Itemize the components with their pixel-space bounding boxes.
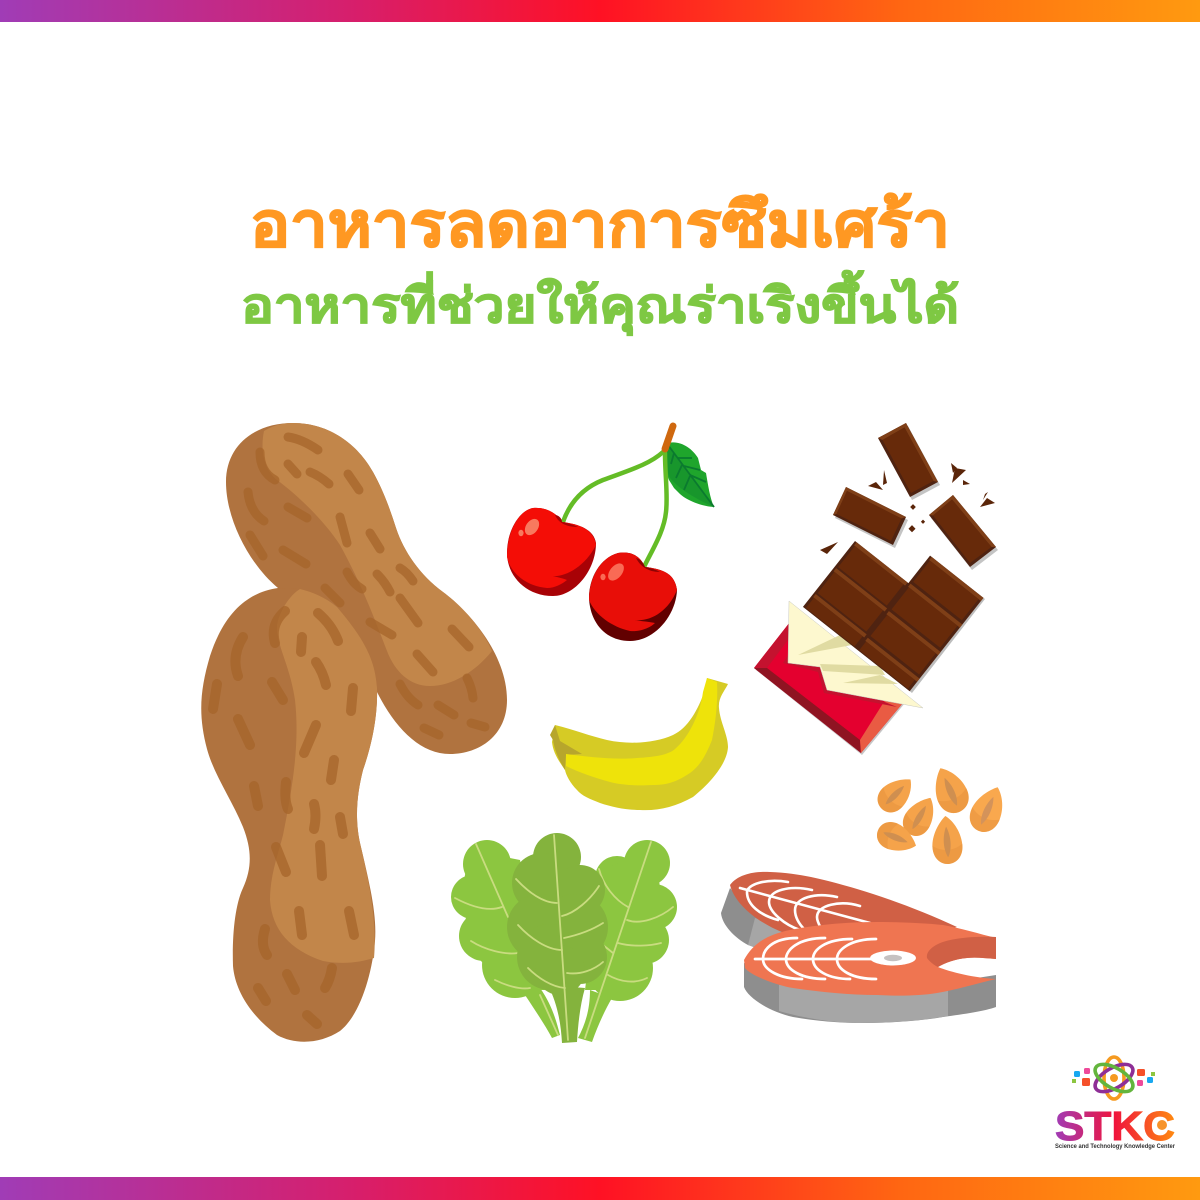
logo atom mark bbox=[1091, 1057, 1137, 1099]
icon: chocolate bar bbox=[754, 423, 998, 755]
right leaf bbox=[578, 840, 677, 1042]
broken pieces bbox=[833, 423, 998, 570]
left leaf bbox=[451, 840, 560, 1038]
stems bbox=[563, 452, 667, 567]
logo dots bbox=[1072, 1068, 1155, 1086]
back salmon steak bbox=[721, 872, 957, 947]
front salmon steak bbox=[744, 922, 996, 1023]
icon: almonds bbox=[872, 762, 1011, 865]
white paper bbox=[788, 601, 923, 708]
icon: cherries bbox=[507, 426, 714, 641]
front peanut bbox=[201, 588, 377, 1042]
logo: STKC bbox=[1055, 1057, 1176, 1150]
logo tagline: Science and Technology Knowledge Center bbox=[1055, 1144, 1176, 1150]
left cherry bbox=[507, 508, 596, 596]
chocolate shards bbox=[820, 463, 995, 554]
bottom gradient band bbox=[0, 1177, 1200, 1200]
logo letters: STKC bbox=[1055, 1103, 1175, 1149]
bar segments bbox=[803, 514, 985, 693]
top gradient band bbox=[0, 0, 1200, 22]
icon: banana bbox=[550, 678, 728, 810]
red wrapper bbox=[754, 622, 905, 755]
icon: leafy greens bbox=[451, 833, 677, 1043]
logo dot in C bbox=[1157, 1120, 1167, 1130]
middle leaf bbox=[507, 833, 608, 1043]
leaf bbox=[666, 442, 714, 507]
right cherry bbox=[589, 553, 677, 641]
stalk bbox=[665, 426, 673, 449]
subtitle: อาหารที่ช่วยให้คุณร่าเริงขึ้นได้ bbox=[241, 270, 959, 336]
icon: salmon steaks bbox=[721, 872, 996, 1023]
title: อาหารลดอาการซึมเศร้า bbox=[250, 191, 950, 260]
icon: peanuts bbox=[201, 423, 507, 1042]
back peanut bbox=[226, 423, 507, 754]
chocolate squares bbox=[806, 519, 979, 689]
square highlights bbox=[812, 515, 983, 682]
